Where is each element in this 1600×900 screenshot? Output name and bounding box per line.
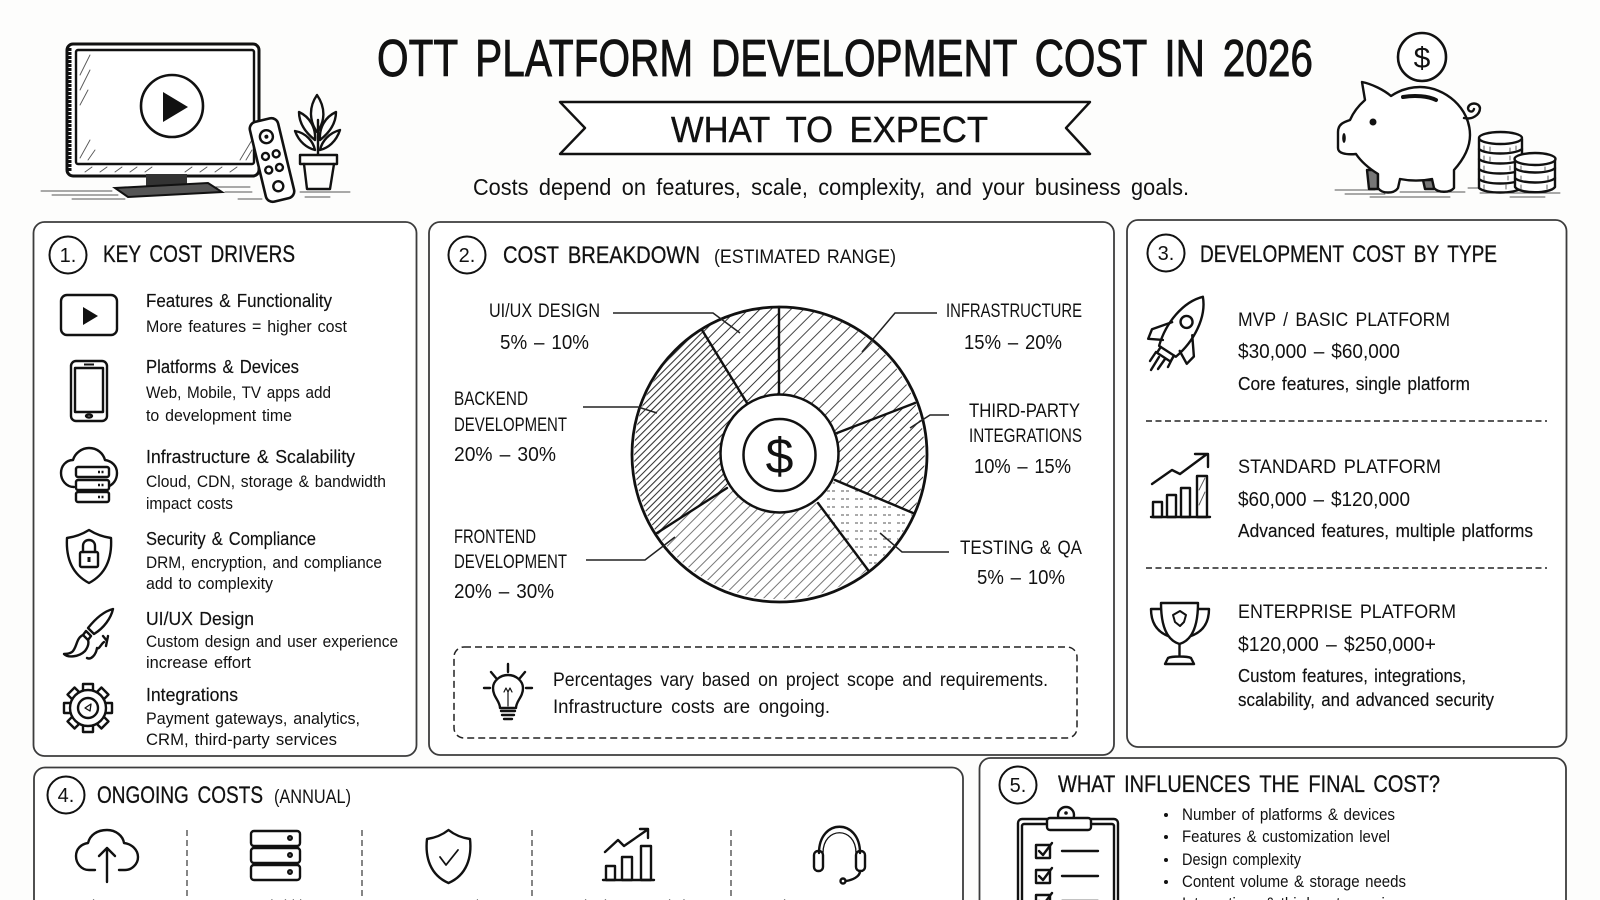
driver: security and compliance: Security & Compliance [146,529,316,549]
panel 4 heading [48,776,351,814]
label: third-party integrations: THIRD-PARTY [969,401,1080,422]
label: frontend development [454,527,567,603]
influence factor list: Number of platforms & devices [1182,806,1395,824]
icon: trophy [1151,603,1209,664]
panel 3: development cost by type [1127,220,1566,747]
label: infrastructure: INFRASTRUCTURE [946,301,1082,322]
driver: security and compliance: DRM, encryption, and compliance [146,554,382,572]
panel 4 heading: ONGOING COSTS [97,782,263,809]
cost: maintenance and support [763,827,916,900]
panel 5: what influences the final cost [980,758,1566,900]
callout note: Percentages vary based on project scope and requirements. [553,669,1048,691]
label: backend development: BACKEND [454,389,528,410]
panel 4 heading: (ANNUAL) [274,787,351,808]
label: frontend development: DEVELOPMENT [454,552,567,573]
tier: standard platform: Advanced features, multiple platforms [1238,521,1533,541]
label: frontend development: FRONTEND [454,527,536,548]
cost: bandwidth [240,831,307,900]
panel 2 heading: COST BREAKDOWN [503,242,700,269]
tier: MVP / basic platform: MVP / BASIC PLATFORM [1238,310,1450,331]
tier: enterprise platform [1151,602,1494,710]
driver: platforms and devices: Platforms & Devices [146,357,299,377]
driver: infrastructure and scalability: Cloud, CDN, storage & bandwidth [146,473,386,491]
tier: MVP / basic platform: $30,000 – $60,000 [1238,341,1400,363]
leader lines [583,313,949,560]
callout note: Infrastructure costs are ongoing. [553,696,830,718]
label: testing and QA: 5% – 10% [977,567,1065,589]
driver: infrastructure and scalability: Infrastructure & Scalability [146,447,355,467]
subtitle banner [560,102,1090,154]
tier: standard platform: STANDARD PLATFORM [1238,457,1441,478]
tier: enterprise platform: scalability, and advanced security [1238,690,1494,710]
donut chart with dollar centre [632,307,927,602]
driver: features and functionality [61,291,347,336]
driver: security and compliance [67,529,382,593]
panel 1 heading [50,236,295,274]
panel 3 heading [1148,234,1497,272]
driver: security and compliance: add to complexity [146,575,274,593]
label: infrastructure: 15% – 20% [964,332,1062,354]
influence factor list [1164,806,1408,900]
influence factor list: Content volume & storage needs [1182,873,1406,891]
panel 2: cost breakdown [429,222,1114,755]
label: backend development: DEVELOPMENT [454,415,567,436]
panel 5 heading: 5. [1010,775,1026,797]
driver: integrations: Payment gateways, analytics, [146,710,360,728]
driver: platforms and devices [71,357,331,425]
driver: integrations: Integrations [146,685,238,705]
label: testing and QA [960,538,1082,589]
tier: enterprise platform: Custom features, integrations, [1238,666,1466,686]
title: OTT PLATFORM DEVELOPMENT COST IN 2026 [377,30,1313,88]
panel 1 heading: 1. [60,245,76,267]
header illustration: TV with remote and plant [41,44,350,203]
driver: UI/UX design: UI/UX Design [146,609,254,629]
icon: light bulb [484,664,532,719]
panel 1: key cost drivers [34,222,416,756]
driver: infrastructure and scalability [61,447,386,513]
driver: platforms and devices: to development time [146,407,292,425]
driver: platforms and devices: Web, Mobile, TV apps add [146,384,331,402]
label: infrastructure [946,301,1082,354]
panel 4: ongoing costs [34,768,963,900]
tier: MVP / basic platform [1143,283,1470,394]
label: UI/UX design: 5% – 10% [500,332,589,354]
label: testing and QA: TESTING & QA [960,538,1082,559]
panel 1 heading: KEY COST DRIVERS [103,241,295,268]
header illustration: piggy bank with coins: $ [1414,42,1431,75]
label: third-party integrations: 10% – 15% [974,456,1071,478]
tier: standard platform: $60,000 – $120,000 [1238,489,1410,511]
panel 3 heading: 3. [1158,243,1174,265]
panel 3 heading: DEVELOPMENT COST BY TYPE [1200,241,1497,268]
influence factor list: Features & customization level [1182,828,1390,846]
icon: growth chart [1151,454,1210,517]
label: third-party integrations [969,401,1082,478]
label: third-party integrations: INTEGRATIONS [969,426,1082,447]
driver: infrastructure and scalability: impact costs [146,495,233,513]
label: UI/UX design: UI/UX DESIGN [489,301,600,322]
tier: enterprise platform: $120,000 – $250,000+ [1238,634,1436,656]
donut chart with dollar centre: $ [766,428,793,484]
driver: UI/UX design: Custom design and user experience [146,633,398,651]
driver: features and functionality: Features & Functionality [146,291,332,311]
driver: integrations: CRM, third-party services [146,731,337,749]
panel 2 heading: (ESTIMATED RANGE) [714,247,896,268]
tier: MVP / basic platform: Core features, single platform [1238,374,1470,394]
panel 5 heading [1000,766,1440,804]
icon: clipboard checklist [1018,807,1118,900]
label: UI/UX design [489,301,600,354]
tier: standard platform [1151,454,1533,541]
panel 2 heading: 2. [459,245,475,267]
driver: integrations [64,684,360,749]
driver: UI/UX design: increase effort [146,654,251,672]
cost: DRM and security [394,830,489,900]
driver: UI/UX design [64,609,398,672]
cost: monitoring and analytics [556,829,700,900]
callout note [454,647,1077,738]
panel 5 heading: WHAT INFLUENCES THE FINAL COST? [1058,771,1440,798]
tier: enterprise platform: ENTERPRISE PLATFORM [1238,602,1456,623]
influence factor list: Design complexity [1182,851,1302,869]
label: frontend development: 20% – 30% [454,581,554,603]
tagline: Costs depend on features, scale, complexity, and your business goals. [473,174,1189,200]
panel 2 heading [448,236,896,274]
subtitle banner: WHAT TO EXPECT [671,109,988,150]
cost: hosting and CDN [63,830,161,900]
icon: rocket [1143,283,1224,371]
label: backend development [454,389,567,466]
label: backend development: 20% – 30% [454,444,556,466]
driver: features and functionality: More features = higher cost [146,318,347,336]
header illustration: piggy bank with coins [1335,33,1560,197]
panel 4 heading: 4. [58,785,74,807]
